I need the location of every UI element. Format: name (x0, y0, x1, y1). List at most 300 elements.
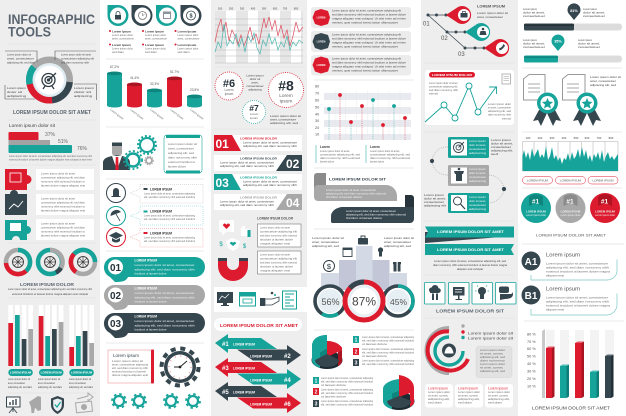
podium notes (312, 236, 414, 248)
icon: billboard (453, 287, 464, 300)
feature list (109, 30, 200, 54)
gauge: 56% (315, 286, 345, 316)
callout: graduation cap: elit, sed diam nonummy nibh euismod tincidunt (144, 239, 195, 243)
podium notes: Lorem ipsum dolor sit (384, 236, 414, 240)
title (8, 12, 95, 40)
hexagon list: row 3: veniam, quis nostrud exerci tation ullamcorper (332, 68, 398, 72)
donut callouts: adipiscing (74, 94, 92, 98)
rank circle: teal (521, 193, 551, 223)
bar chart labels: amet, consectetuer (69, 381, 86, 385)
pin 1 (446, 6, 471, 24)
puzzle item: dark (5, 190, 94, 215)
text boxes: outlined: magna aliquam erat (260, 242, 290, 246)
hexagon list: row 3: sed diam nonummy nibh euismod tincidunt ut laoreet dolore (332, 60, 406, 64)
red note box: dolore magna aliquam erat (112, 373, 148, 377)
feature list: Lorem Ipsum (112, 30, 131, 34)
icon: shield (51, 396, 64, 414)
arrow: #1: LOREM IPSUM (233, 342, 255, 346)
feature list: Lorem Ipsum (112, 43, 131, 47)
bubble: #7: Lorem (250, 112, 259, 116)
pill: 02 (104, 285, 205, 310)
line chart: two series: 800 (294, 6, 299, 10)
bar chart labels: adipiscing elit, sed diam (8, 385, 32, 389)
gauge: 87% (345, 282, 383, 320)
bar chart labels: Lorem ipsum dolor sit (38, 377, 60, 381)
pie legend 2: ut laoreet dolore (321, 394, 346, 398)
text boxes: outlined: Lorem ipsum dolor sit amet (260, 252, 290, 256)
hexagon list: row 2: LOREM (317, 40, 325, 44)
area chart pills (522, 176, 618, 184)
pill: 03: tincidunt ut laoreet dolore (134, 328, 167, 332)
cylinder chart: Lorem ipsum (169, 108, 185, 121)
process flow: adipiscing elit, (491, 148, 513, 152)
pill: 03: LOREM IPSUM (134, 314, 157, 318)
cards row: sed diam (488, 400, 503, 404)
cards row: sit amet, consec (428, 394, 448, 398)
pill: 01: LOREM IPSUM (134, 258, 157, 262)
red note box: Lorem ipsum dolor sit (112, 359, 143, 363)
panel: column 1 background (0, 0, 100, 416)
donut callouts: adipiscing elit, sed diam (7, 60, 35, 64)
progress: 81% (523, 3, 622, 31)
text boxes: outlined: magna aliquam erat (260, 268, 290, 272)
3D bar chart: 40 % (527, 362, 536, 366)
cylinder chart: Lorem ipsum (149, 108, 165, 121)
puzzle item: teal: laoreet dolore magna aliquam erat (41, 234, 85, 238)
rank circle: gray: Lorem ipsum dolor (560, 213, 581, 217)
dot chart notes: Lorem ipsum dolor sit amet, (370, 149, 400, 153)
pill: 03: 03 (110, 319, 121, 330)
ribbon: 01: adipiscing elit, sed diam nonummy nibh (243, 144, 297, 148)
dot chart notes: consectetuer adipiscing elit, sed (320, 152, 360, 156)
puzzle item: dark: Lorem ipsum dolor sit amet (41, 196, 75, 200)
cylinder chart: Lorem ipsum (189, 108, 205, 121)
progress: 81%: Lorem ipsum (583, 7, 597, 11)
puzzle item: red: Lorem ipsum dolor sit amet (41, 172, 75, 176)
dot chart: 30 (315, 119, 319, 123)
grouped bar chart (8, 305, 94, 366)
rank circle: gray (556, 193, 586, 223)
pie legend 2: ut laoreet dolore (321, 383, 346, 387)
pin timeline: 03 (458, 52, 465, 58)
certificate note (590, 75, 621, 87)
line chart: two series: 600 (273, 6, 278, 10)
donut callouts (5, 51, 96, 100)
icon: target (42, 73, 56, 89)
cylinder chart: 51,7% (170, 70, 179, 74)
feature list: Lorem ipsum dolor (145, 46, 166, 50)
process flow: sed (491, 152, 498, 156)
bubble notes: dolor sit (250, 77, 260, 81)
white panel: growth chart (425, 70, 514, 125)
step: podium (448, 165, 489, 186)
ribbon: 02: adipiscing elit, sed diam nonummy nibh (220, 164, 274, 168)
pie legend 2: elit, sed diam nonummy nibh euismod tincidunt (321, 380, 373, 384)
arrow: #4: LOREM IPSUM (250, 378, 272, 382)
pin timeline: Lorem ipsum dolor sit (477, 11, 508, 15)
progress: 35%: consectetuer (523, 45, 545, 49)
feature list: sed diam (178, 50, 190, 54)
3D bar chart: 10 % (527, 384, 536, 388)
gray note box (476, 346, 512, 378)
heading: donut: LOREM IPSUM DOLOR SIT AMET (13, 110, 91, 116)
ribbon: 02: LOREM IPSUM DOLOR (240, 156, 278, 160)
puzzle item: teal: nonummy nibh euismod tincidunt ut (41, 230, 85, 234)
pie legend 2: elit, sed diam nonummy nibh euismod tincidunt (321, 402, 373, 406)
text boxes: outlined: LOREM IPSUM DOLOR (257, 216, 294, 220)
bar chart labels: Lorem ipsum dolor sit (69, 377, 91, 381)
item: B1: adipiscing elit, sed diam nonummy nibh (546, 300, 609, 304)
3D bar chart: 50 % (527, 354, 536, 358)
icon: money (76, 393, 93, 413)
3D bar chart: 20 % (527, 377, 536, 381)
pin timeline: 01 (423, 22, 430, 28)
panel: column 3 background (211, 0, 307, 416)
panel: column 5 background (421, 0, 518, 416)
text boxes: outlined: tincidunt ut laoreet dolore (260, 238, 293, 242)
pill: 02: 02 (110, 291, 121, 302)
cards row: sit amet, consec (488, 394, 508, 398)
ribbon: 04 (214, 194, 302, 210)
bubble notes: consectetuer (246, 84, 264, 88)
ribbon: 03: Lorem ipsum dolor sit amet, consectetuer (243, 180, 297, 184)
teal ribbons: aliquam erat volutpat (457, 267, 483, 271)
stacked progress bars: 76% (77, 146, 88, 152)
bar chart labels: adipiscing elit, sed diam (38, 385, 62, 389)
rank circle: teal: Lorem ipsum dolor (526, 213, 546, 217)
podium notes: Lorem ipsum dolor sit (312, 236, 344, 240)
gray note box: sit amet, consec (480, 366, 504, 370)
heading: wheels: euismod tincidunt ut laoreet dolore magna aliquam erat volutpat (12, 292, 88, 296)
cards row (425, 384, 513, 408)
cards row: adipiscing elit, (458, 397, 480, 401)
progress: 81%: consectetuer (523, 14, 545, 18)
bubble notes: Lorem ipsum (246, 74, 264, 78)
arrow: #1: #1 (222, 342, 229, 348)
pill: 03: adipiscing elit, sed diam nonummy nibh (134, 323, 195, 327)
arrow: #2 (237, 345, 301, 365)
white panel: growth chart: euismod (502, 116, 511, 120)
callout: graduation cap: LOREM IPSUM (150, 232, 172, 236)
certificate note: adipiscing elit, sed (590, 83, 616, 87)
bar chart labels: LOREM IPSUM (10, 371, 32, 375)
icon: bulb (378, 247, 383, 256)
podium chart (321, 236, 407, 295)
banner: dark (331, 195, 414, 223)
callout: umbrella: Lorem ipsum dolor sit amet, consectetuer adipiscing (144, 214, 195, 218)
pie legend 1: Lorem ipsum dolor sit amet, consectetuer adipiscing (362, 358, 414, 362)
white panel: growth chart: consectetuer adipiscing elit, (429, 84, 458, 88)
hexagon list: row 2: sed diam nonummy nibh euismod tincidunt ut laoreet dolore (332, 36, 406, 40)
progress: 35%: 35% (554, 40, 562, 44)
rank circle: gray: #1 (566, 198, 574, 206)
pill: 03 (104, 313, 205, 338)
line chart: two series: 400 (251, 6, 256, 10)
gauge: 45% (383, 286, 413, 316)
item: A1: Lorem ipsum (546, 252, 580, 258)
pill: 02: tincidunt ut laoreet dolore (134, 300, 167, 304)
red note box (108, 350, 154, 384)
donut callouts: consectetuer adipiscing elit (61, 56, 94, 60)
step: podium: adipiscing (469, 179, 486, 183)
text box: teal frame: adipiscing elit, sed (168, 151, 194, 155)
feature list: sed diam (145, 50, 157, 54)
bubble notes: adipiscing elit, sed (270, 121, 298, 125)
dot chart notes: diam nonummy nibh euismod (320, 156, 360, 160)
pie legend 2: Lorem ipsum dolor sit amet, consectetuer adipiscing (321, 388, 373, 392)
puzzle item: teal (5, 219, 94, 240)
ribbon: 01 (214, 135, 302, 151)
podium notes: adipiscing elit, sed (312, 244, 339, 248)
hexagon list: row 3: magna aliquam erat volutpat. Ut wisi enim ad minim (332, 64, 407, 68)
icon: chat (499, 286, 513, 300)
item: A1: adipiscing elit, sed diam nonummy nibh (546, 266, 609, 270)
donut callouts: sed diam nonummy nibh (61, 60, 89, 64)
gray note box: adipiscing elit, sed (480, 355, 505, 359)
feature list: Lorem ipsum dolor (178, 33, 199, 37)
feature list: Lorem Ipsum (145, 43, 164, 47)
title: INFOGRAPHIC (8, 12, 95, 27)
rank circle: red: Lorem ipsum dolor (595, 213, 615, 217)
pill: 02: LOREM IPSUM (134, 286, 157, 290)
pie legend 1: elit, sed diam nonummy nibh euismod tincidunt (362, 338, 414, 342)
hexagon list: row 1: Lorem ipsum dolor sit amet, consectetuer adipiscing elit (332, 8, 401, 12)
icon: magnet (218, 258, 248, 281)
icon: gift (393, 262, 401, 272)
dot chart notes: Lorem (320, 145, 330, 149)
text boxes: outlined (257, 216, 301, 274)
banner: gray: tincidunt ut laoreet dolore (326, 195, 362, 199)
gray note box: sit amet, consec (480, 352, 504, 356)
item: B1 (522, 286, 617, 315)
cylinder chart: 41,4% (130, 76, 139, 80)
progress: 35% (523, 35, 622, 62)
cards row: Lorem ipsum dolor (458, 390, 480, 394)
arrow: #1 (215, 334, 277, 353)
line chart: two series: 700 (283, 6, 288, 10)
line chart: two series: 300 (240, 6, 245, 10)
process flow: dolor sit amet, (491, 142, 513, 146)
progress: 35%: Lorem ipsum (578, 38, 592, 42)
hexagon list: row 1: LOREM (317, 16, 325, 20)
cylinder chart: 67,2% (110, 65, 119, 69)
certificate badge 1 (524, 74, 561, 126)
hexagon list: row 3: Lorem ipsum dolor sit amet, consectetuer adipiscing elit (332, 56, 401, 60)
rank circle: red: LOREM IPSUM (595, 210, 616, 214)
ribbon: 03: adipiscing elit, sed diam nonummy nibh (243, 183, 297, 187)
arrow: #4 (237, 369, 301, 389)
step: podium: dolor sit amet, (469, 171, 486, 175)
stacked progress bars (8, 123, 92, 162)
area chart: 200 (538, 136, 543, 140)
magnet scene (218, 220, 250, 281)
stacked progress bars: Lorem ipsum dolor sit (9, 123, 56, 128)
pin 3 (484, 39, 509, 57)
pie legend 1: ut laoreet dolore (362, 354, 387, 358)
arrow: #2: LOREM IPSUM (250, 354, 272, 358)
dot chart: 50 (315, 106, 319, 110)
concentric arc chart (427, 328, 468, 373)
heading: rank circles: LOREM IPSUM DOLOR SIT AMET (536, 232, 607, 238)
text boxes: outlined: consectetuer adipiscing elit (260, 230, 297, 234)
banner: dark: Lorem ipsum dolor sit amet, consectetuer (346, 209, 396, 213)
cards row: sed diam (428, 400, 443, 404)
line chart: two series (215, 6, 303, 63)
bubble notes: amet, consectetuer (270, 118, 296, 122)
icon: gear clock (162, 348, 198, 386)
pie legend 1 (353, 335, 414, 366)
red note box: euismod tincidunt ut laoreet (112, 370, 146, 374)
puzzle item: teal: consectetuer adipiscing elit, sed diam (41, 226, 85, 230)
icons: small teal gears (112, 394, 200, 408)
white panel: growth chart: adipiscing elit, sed (488, 109, 511, 113)
pie legend 1: 2 (355, 350, 358, 356)
bubble notes (246, 74, 301, 125)
feature list: sed diam (112, 50, 124, 54)
item: A1: A1 (525, 257, 538, 268)
process flow: consectetuer (491, 145, 511, 149)
bubble: #6 (215, 72, 243, 100)
step: magnifier (448, 193, 489, 213)
step: target: consectetuer (469, 147, 486, 151)
puzzle item: red (5, 169, 94, 190)
donut callouts: Lorem ipsum dolor sit amet (61, 52, 91, 56)
dot chart notes: Lorem ipsum dolor sit amet, (320, 149, 350, 153)
pin timeline: 02 (441, 36, 448, 42)
arrow: #5: #5 (222, 390, 229, 396)
red heading pill (214, 318, 302, 331)
donut callouts: dolor sit (74, 90, 91, 94)
process flow (424, 137, 513, 213)
hexagon list: row 2: magna aliquam erat volutpat. Ut wisi enim ad minim (332, 40, 407, 44)
pie legend 2: 1 (315, 378, 318, 384)
stacked progress bars: 51% (58, 139, 69, 145)
step: target (448, 137, 489, 158)
callout: graduation cap: Lorem ipsum dolor sit amet, consectetuer adipiscing (144, 236, 195, 240)
ribbon: 04: Lorem ipsum dolor sit amet, consectetuer (220, 200, 274, 204)
ribbon: 01: 01 (216, 137, 229, 151)
icon: cloud (429, 285, 441, 300)
dot chart: 60 (315, 98, 319, 102)
area chart (522, 136, 618, 171)
ribbon: 01: LOREM IPSUM DOLOR (240, 136, 278, 140)
icon: megaphone (29, 396, 41, 413)
step: target: Lorem ipsum (469, 139, 486, 143)
progress: 81%: 81% (570, 9, 578, 13)
arrow: #3: #3 (222, 366, 229, 372)
dot chart notes: laoreet dolore (320, 160, 334, 164)
callout: umbrella: LOREM IPSUM (150, 210, 172, 214)
line chart: two series: 200 (229, 6, 234, 10)
pie legend 2: Lorem ipsum dolor sit amet, consectetuer adipiscing (321, 376, 373, 380)
red note box: elit, sed diam nonummy nibh (112, 366, 148, 370)
title: TOOLS (8, 24, 51, 40)
step: podium: consectetuer (469, 175, 486, 179)
feature list: Lorem ipsum dolor (112, 46, 133, 50)
text boxes: outlined: tincidunt ut laoreet dolore (260, 264, 293, 268)
bar chart labels: Lorem ipsum dolor sit (8, 377, 30, 381)
area chart: 600 (585, 136, 590, 140)
stacked progress bars: euismod tincidunt ut laoreet dolore magna aliquam erat volutpat ut wisi enim (9, 158, 92, 162)
bubble: #7: #7 (249, 103, 259, 113)
process flow: Lorem ipsum (491, 138, 512, 142)
process flow: consectetuer (424, 200, 444, 204)
wheel gauges (6, 250, 95, 274)
cylinder chart: Lorem ipsum (129, 108, 145, 121)
3D bar chart: 60 % (527, 347, 536, 351)
pie legend 1: 3 (355, 360, 358, 366)
pie legend 2: 2 (315, 390, 318, 396)
ribbon: 01: Lorem ipsum dolor sit amet, consectetuer (243, 140, 297, 144)
area chart pills: LOREM IPSUM (560, 178, 581, 182)
progress: 81%: Lorem ipsum (523, 7, 537, 11)
pie legend 2: 3 (315, 402, 318, 408)
puzzle item: teal: Lorem ipsum dolor sit amet (41, 222, 75, 226)
white panel: growth chart: sed diam nonummy nibh (429, 88, 458, 92)
puzzle item: red: consectetuer adipiscing elit, sed diam (41, 176, 85, 180)
puzzle item: dark: nonummy nibh euismod tincidunt ut (41, 204, 85, 208)
progress: 81%: dolor sit amet, (583, 10, 605, 14)
feature list: amet, consectetuer (178, 36, 200, 40)
area chart: 400 (562, 136, 567, 140)
item: A1: euismod tincidunt ut laoreet dolore magna (546, 270, 610, 274)
white panel: growth chart: euismod (429, 92, 438, 96)
progress: 35%: dolor sit amet, (578, 42, 600, 46)
cards row: sed diam (458, 400, 473, 404)
certificate note: amet, consectetuer (590, 79, 616, 83)
gray note box: diam nonummy (480, 358, 506, 362)
icon tiles (424, 282, 516, 304)
gauge: 45%: 45% (390, 297, 407, 307)
donut chart with target (30, 60, 70, 100)
progress: 35%: consectetuer (578, 45, 600, 49)
cards row: Lorem ipsum dolor (488, 390, 510, 394)
bubble: #8: #8 (278, 78, 294, 94)
cylinder chart: 32,3% (150, 82, 159, 86)
icon strip (214, 287, 307, 312)
donut callouts: Lorem ipsum (74, 86, 95, 90)
banner: dark: adipiscing elit, sed diam nonummy nibh euismod (346, 212, 406, 216)
banner: gray (314, 173, 397, 201)
item: B1: Lorem ipsum dolor sit amet, consectetuer (546, 296, 608, 300)
pie legend 1: 1 (355, 338, 358, 344)
bubble notes: adipiscing (248, 88, 262, 92)
item: A1 (522, 252, 617, 280)
heading: wheels: LOREM IPSUM DOLOR (20, 282, 75, 287)
text box: teal frame: diam nonummy nibh (168, 156, 197, 160)
feature list: Lorem ipsum dolor (112, 33, 133, 37)
banner: gray: LOREM IPSUM DOLOR SIT (329, 178, 387, 182)
banner: dark: tincidunt ut laoreet dolore (346, 216, 382, 220)
white panel: growth chart: Lorem ipsum dolor (488, 102, 511, 106)
feature list: amet, consectetuer (145, 36, 167, 40)
feature list: Lorem ipsum dolor (178, 46, 199, 50)
process flow: Lorem ipsum (424, 193, 445, 197)
pie legend 1: elit, sed diam nonummy nibh euismod tincidunt (362, 350, 414, 354)
item: B1: euismod tincidunt ut laoreet dolore magna (546, 304, 610, 308)
arc chart legend (461, 324, 514, 340)
callout: bell (106, 184, 203, 203)
hexagon list: row 3 (311, 55, 411, 76)
area chart: 100 (526, 136, 531, 140)
step: magnifier: Lorem ipsum (469, 195, 486, 199)
teal ribbons: diam nonummy nibh euismod tincidunt ut laoreet dolore magna (433, 263, 507, 267)
item: B1: Lorem ipsum (546, 286, 580, 292)
area chart: 700 (597, 136, 602, 140)
progress: 81%: dolor sit amet, (523, 10, 545, 14)
icons: teardrop row (108, 5, 202, 26)
arrow: #5 (215, 382, 277, 401)
